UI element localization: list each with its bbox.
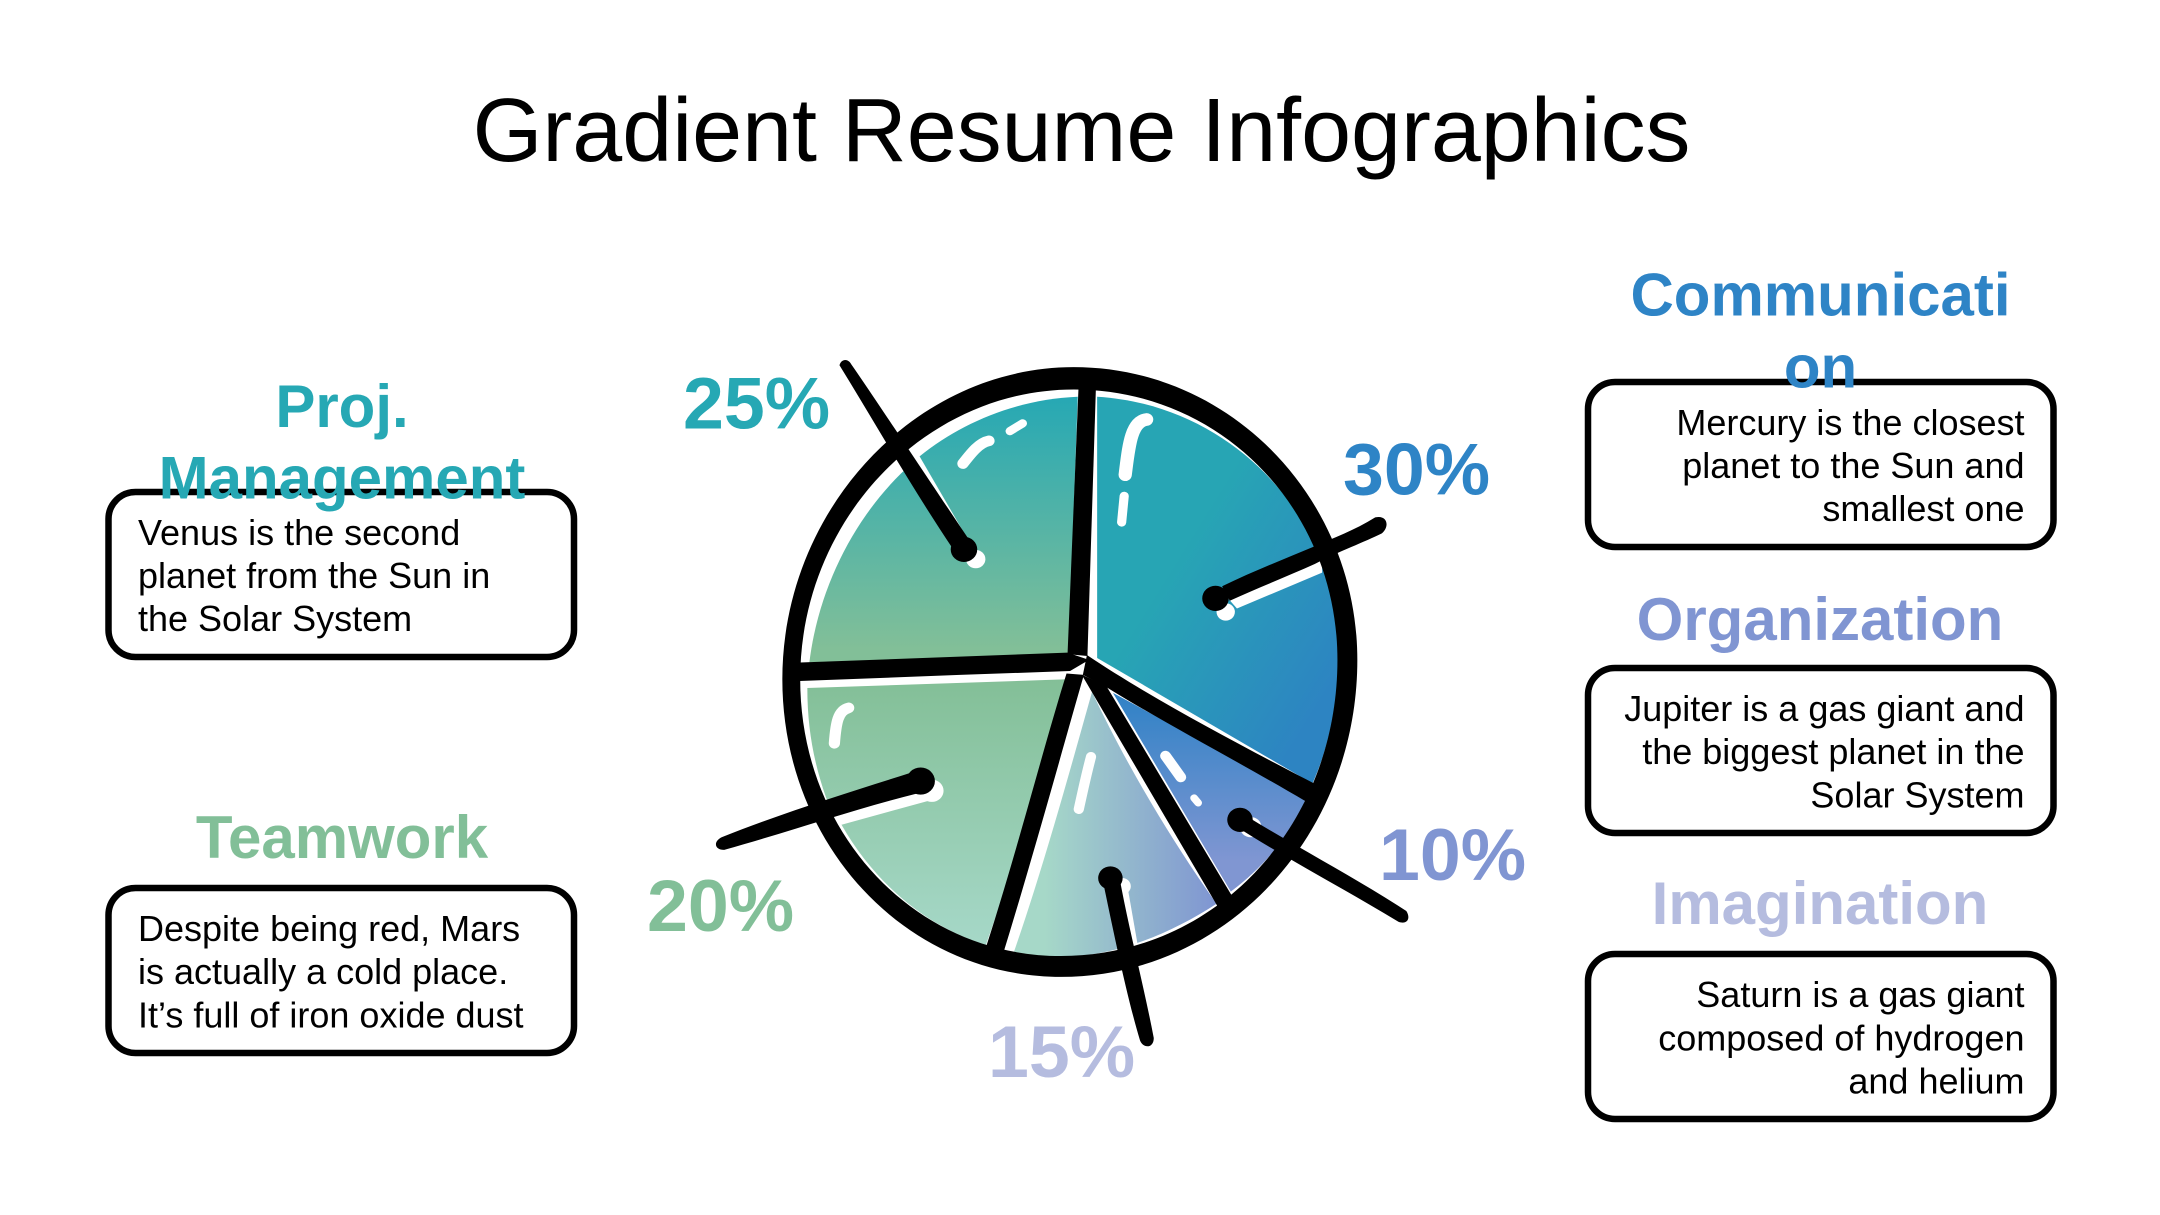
label: 25%: 25% xyxy=(683,362,830,444)
slice: 15% xyxy=(1014,692,1217,957)
description box: Saturn: Saturn is a gas giant xyxy=(1696,974,2024,1015)
panel: imagination xyxy=(1588,870,2054,1119)
description box: Jupiter: Solar System xyxy=(1810,774,2024,816)
slice: 20% xyxy=(807,679,1068,945)
description box: Mercury: Mercury is the closest xyxy=(1676,402,2024,443)
panel: project management xyxy=(108,373,574,657)
heading: Proj. Management: Management xyxy=(159,444,525,512)
title: Gradient Resume Infographics xyxy=(473,81,1690,181)
label: 15%: 15% xyxy=(988,1010,1135,1093)
pointer: 30% xyxy=(1202,517,1387,611)
description box: Venus: Venus is the second xyxy=(138,512,460,553)
description box: Venus: the Solar System xyxy=(138,598,412,639)
description box: Saturn: and helium xyxy=(1848,1060,2024,1102)
slice: 25% xyxy=(809,397,1078,662)
highlights xyxy=(834,419,1198,809)
spokes xyxy=(793,381,1317,957)
pointer: 10% xyxy=(1227,808,1408,923)
description box: Mercury xyxy=(1588,382,2054,547)
label: 30%: 30% xyxy=(1343,428,1490,510)
description box: Venus: planet from the Sun in xyxy=(138,555,490,596)
panel: teamwork xyxy=(108,804,574,1053)
description box: Jupiter xyxy=(1588,668,2054,833)
label: 20%: 20% xyxy=(647,864,794,947)
heading: Proj. Management xyxy=(159,373,525,512)
heading: Organization: Organization xyxy=(1637,586,2003,653)
slice: 30% xyxy=(1097,397,1338,784)
description box: Mars xyxy=(108,888,574,1053)
description box: Mercury: planet to the Sun and xyxy=(1682,445,2024,486)
panel: communication xyxy=(1588,262,2054,547)
description box: Mercury: smallest one xyxy=(1822,488,2024,529)
slice: 10% xyxy=(1113,693,1306,892)
description box: Venus xyxy=(108,492,574,657)
pointer: 25% xyxy=(839,360,977,562)
heading: Communication: Communicati xyxy=(1630,262,2011,328)
heading: Proj. Management: Proj. xyxy=(275,373,409,440)
panel: organization xyxy=(1588,586,2054,833)
heading: Communication: on xyxy=(1784,334,1857,400)
label: 10%: 10% xyxy=(1379,813,1526,896)
description box: Mars: is actually a cold place. xyxy=(138,951,508,992)
pie outline xyxy=(782,367,1357,977)
description box: Mars: It’s full of iron oxide dust xyxy=(138,994,524,1036)
pointer: 20% xyxy=(716,768,935,850)
description box: Jupiter: the biggest planet in the xyxy=(1642,731,2024,772)
heading: Teamwork: Teamwork xyxy=(196,804,489,871)
description box: Saturn xyxy=(1588,954,2054,1119)
pie chart xyxy=(716,360,1408,1046)
description box: Mars: Despite being red, Mars xyxy=(138,908,520,949)
heading: Communication xyxy=(1630,262,2011,400)
heading: Imagination: Imagination xyxy=(1652,870,1988,937)
pointer shadows xyxy=(831,456,1322,946)
pointer: 15% xyxy=(1098,866,1154,1046)
description box: Saturn: composed of hydrogen xyxy=(1658,1018,2024,1058)
description box: Jupiter: Jupiter is a gas giant and xyxy=(1624,688,2024,729)
